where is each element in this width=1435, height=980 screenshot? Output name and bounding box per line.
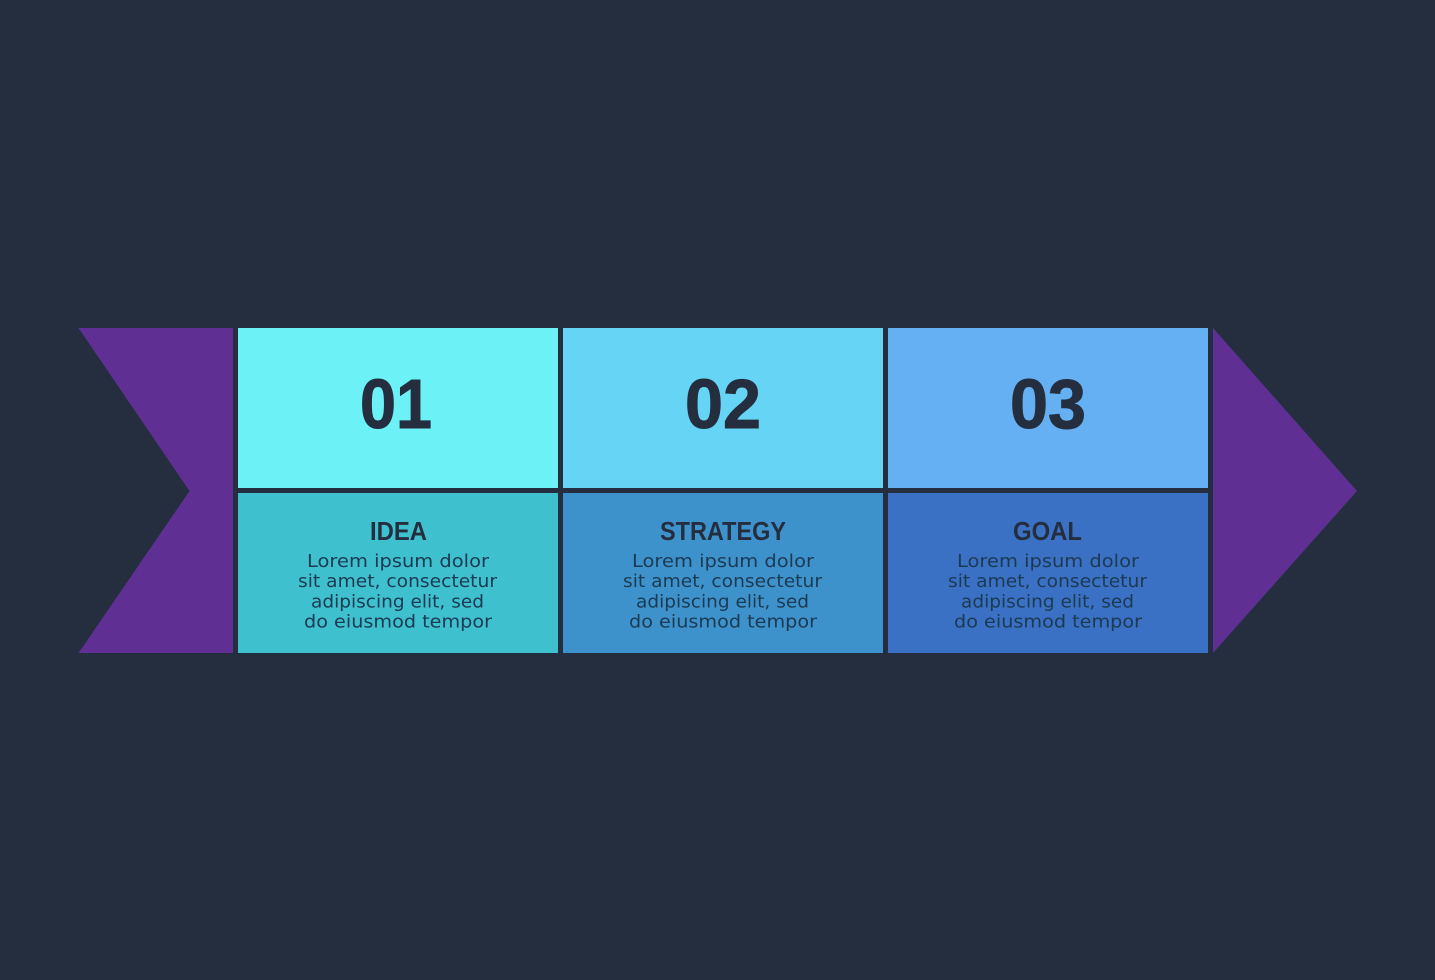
- step 3 number panel: [888, 328, 1208, 488]
- step 2: strategy: [563, 328, 883, 653]
- step 1 number panel: [238, 328, 558, 488]
- step 1 body text: Lorem ipsum dolor: [307, 552, 490, 572]
- step 2 text panel: [563, 493, 883, 653]
- step 1 body text: [298, 552, 498, 632]
- step 2 body text: sit amet, consectetur: [623, 572, 823, 592]
- step 1 text panel: [238, 493, 558, 653]
- arrow head: [1213, 328, 1357, 653]
- step 3 body text: [948, 552, 1148, 632]
- step 1 body text: do eiusmod tempor: [304, 612, 493, 632]
- step 1 body text: adipiscing elit, sed: [311, 592, 484, 612]
- step 2 body text: Lorem ipsum dolor: [632, 552, 815, 572]
- step 2 body text: adipiscing elit, sed: [636, 592, 809, 612]
- step 1 body text: sit amet, consectetur: [298, 572, 498, 592]
- step 3 body text: sit amet, consectetur: [948, 572, 1148, 592]
- step 3 body text: adipiscing elit, sed: [961, 592, 1134, 612]
- step 2 number: 02: [685, 365, 761, 443]
- step 1 number: 01: [360, 365, 432, 443]
- step 1 heading: IDEA: [370, 518, 427, 546]
- step 2 heading: STRATEGY: [660, 518, 786, 546]
- step 2 body text: do eiusmod tempor: [629, 612, 818, 632]
- step 3 body text: Lorem ipsum dolor: [957, 552, 1140, 572]
- step 3: goal: [888, 328, 1208, 653]
- step 2 number panel: [563, 328, 883, 488]
- step 3 body text: do eiusmod tempor: [954, 612, 1143, 632]
- step 2 body text: [623, 552, 823, 632]
- step 3 number: 03: [1010, 365, 1086, 443]
- step 1: idea: [238, 328, 558, 653]
- step 3 heading: GOAL: [1013, 518, 1082, 546]
- arrow tail: [78, 328, 233, 653]
- step 3 text panel: [888, 493, 1208, 653]
